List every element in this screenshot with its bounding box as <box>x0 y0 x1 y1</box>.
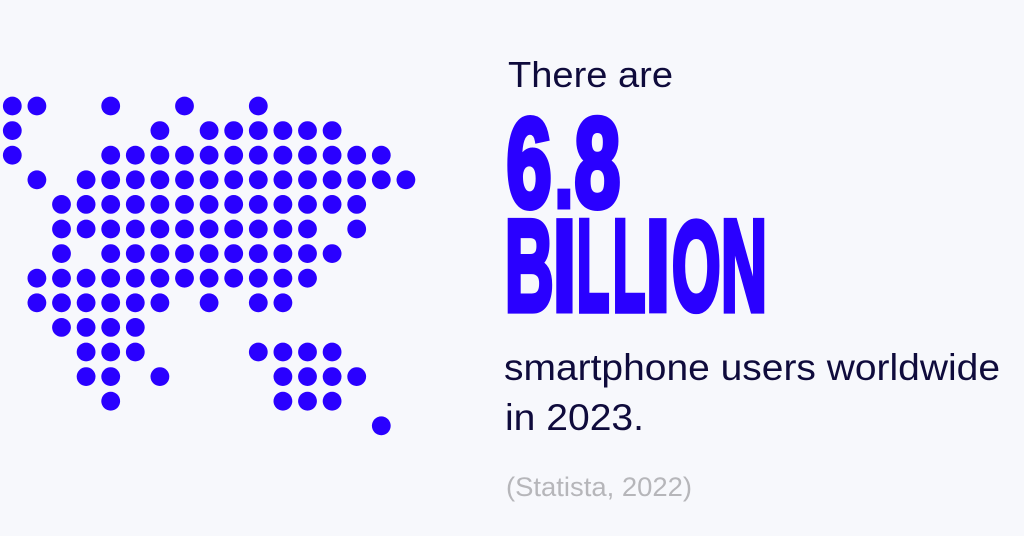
big word: BILLION: L <box>613 194 645 339</box>
big number: 6.8 <box>506 92 620 234</box>
dotted world map <box>3 97 415 435</box>
big word: BILLION: O <box>672 197 721 338</box>
description line 2: in 2023. <box>505 397 644 438</box>
intro text: There are <box>508 54 673 95</box>
big word: BILLION <box>505 192 767 339</box>
big word: BILLION: I <box>552 194 576 339</box>
big number: 6.8: 6 <box>506 92 552 234</box>
big word: BILLION: I <box>645 193 671 338</box>
big word: BILLION: B <box>505 193 554 338</box>
big number: 6.8: . <box>555 116 573 228</box>
big number: 6.8: 8 <box>574 92 620 234</box>
big word: BILLION: N <box>721 192 767 338</box>
description line 1: smartphone users worldwide <box>504 347 1000 388</box>
source citation: (Statista, 2022) <box>506 472 692 502</box>
big word: BILLION: L <box>577 194 609 339</box>
